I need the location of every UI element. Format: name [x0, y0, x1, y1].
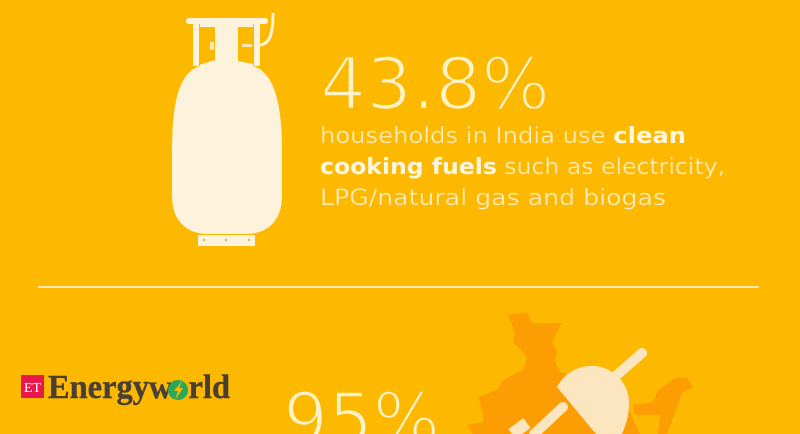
text block: clean cooking fuels description — [320, 124, 725, 211]
logo: green bolt o — [168, 380, 188, 400]
icon: India map north-east — [633, 377, 693, 434]
logo: ET badge — [21, 375, 44, 398]
statistic: 43.8%: 43.8% — [320, 42, 550, 126]
logo: ET badge: ET — [24, 381, 41, 396]
icon: electric plug — [512, 353, 642, 434]
text block: clean cooking fuels description: LPG/natural gas and biogas — [320, 186, 666, 211]
icon: India map — [467, 312, 640, 434]
logo: ET Energyworld — [21, 369, 230, 406]
section divider — [38, 286, 759, 288]
logo: wordmark: Energyworld — [48, 369, 230, 406]
icon: LPG gas cylinder — [172, 13, 282, 246]
text block: clean cooking fuels description: cooking fuels such as electricity, — [320, 155, 725, 180]
text block: clean cooking fuels description: households in India use clean — [320, 124, 686, 149]
